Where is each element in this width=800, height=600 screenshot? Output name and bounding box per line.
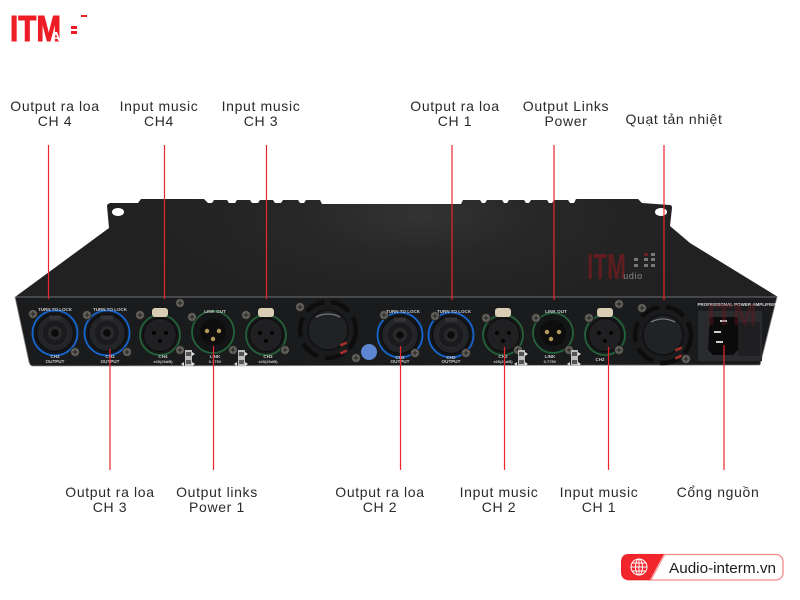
label: output CH2: Output ra loa bbox=[335, 484, 425, 500]
speaker output CH2 bbox=[378, 309, 422, 364]
label: input CH3: Input music bbox=[222, 98, 300, 114]
watermark on panel: ITM bbox=[707, 299, 757, 332]
input XLR CH4 bbox=[136, 298, 184, 364]
cooling fan left bbox=[296, 302, 360, 362]
speaker output CH1: TURN TO LOCK bbox=[437, 309, 472, 314]
label: output CH3: CH 3 bbox=[93, 499, 127, 515]
input XLR CH1 bbox=[584, 300, 625, 362]
speaker output CH1: OUTPUT bbox=[442, 359, 461, 364]
label: output CH1: CH 1 bbox=[438, 113, 472, 129]
input XLR CH4: CH4 bbox=[158, 354, 168, 359]
input XLR CH2: CH2 bbox=[498, 354, 508, 359]
icon: globe bbox=[631, 559, 647, 575]
logo: A bbox=[51, 29, 61, 44]
link out XLR 2 bbox=[514, 309, 581, 366]
label: output links power: Output Links bbox=[523, 98, 609, 114]
website badge: Audio-interm.vn bbox=[669, 560, 776, 577]
logo: ITM bbox=[10, 8, 61, 49]
amplifier top plate bbox=[15, 199, 778, 297]
cooling fan right bbox=[635, 304, 691, 364]
label: output CH3: Output ra loa bbox=[65, 484, 155, 500]
label: input CH2: CH 2 bbox=[482, 499, 516, 515]
label: output links power 1: Output links bbox=[176, 484, 258, 500]
label: input CH3: CH 3 bbox=[244, 113, 278, 129]
label: input CH2: Input music bbox=[460, 484, 538, 500]
rack ear holes bbox=[112, 208, 667, 216]
link out XLR 2: 0.775V bbox=[544, 359, 557, 364]
speaker output CH4 bbox=[28, 307, 80, 364]
speaker output CH3: CH3 bbox=[105, 354, 115, 359]
label: output links power: Power bbox=[545, 113, 587, 129]
rear panel bbox=[15, 297, 777, 366]
speaker output CH3: TURN TO LOCK bbox=[93, 307, 128, 312]
label: output CH4: CH 4 bbox=[38, 113, 72, 129]
link out XLR 1: LINK bbox=[210, 354, 221, 359]
input XLR CH2: ±20(26dB) bbox=[493, 359, 513, 364]
input XLR CH3: ±20(26dB) bbox=[258, 359, 278, 364]
speaker output CH1 bbox=[428, 309, 474, 364]
speaker output CH1: CH2 bbox=[446, 355, 456, 360]
label: input CH1: Input music bbox=[560, 484, 638, 500]
label: output CH1: Output ra loa bbox=[410, 98, 500, 114]
label: input CH4: Input music bbox=[120, 98, 198, 114]
input XLR CH1: CH2 bbox=[595, 357, 605, 362]
label: output links power 1: Power 1 bbox=[189, 499, 245, 515]
link out XLR 1: LINK OUT bbox=[204, 309, 226, 314]
amplifier: rear view bbox=[15, 199, 778, 366]
label: output CH4: Output ra loa bbox=[10, 98, 100, 114]
speaker output CH2: OUTPUT bbox=[391, 359, 410, 364]
label: cooling fan: Quạt tản nhiệt bbox=[625, 111, 723, 127]
callout lines: top bbox=[48, 145, 664, 300]
link out XLR 2: LINK bbox=[545, 354, 556, 359]
link out XLR 1 bbox=[181, 309, 248, 366]
input XLR CH3 bbox=[242, 308, 290, 364]
label: power port: Cổng nguồn bbox=[677, 484, 759, 500]
speaker output CH3 bbox=[82, 307, 132, 364]
speaker output CH4: OUTPUT bbox=[46, 359, 65, 364]
speaker output CH4: CH4 bbox=[50, 354, 60, 359]
website badge bbox=[621, 554, 783, 580]
speaker output CH2: CH2 bbox=[395, 355, 405, 360]
callout lines: bottom bbox=[110, 345, 724, 470]
label: input CH4: CH4 bbox=[144, 113, 174, 129]
input XLR CH2 bbox=[482, 308, 523, 364]
speaker output CH2: TURN TO LOCK bbox=[386, 309, 421, 314]
power inlet bbox=[697, 302, 777, 361]
label: output CH2: CH 2 bbox=[363, 499, 397, 515]
watermark on top plate: udio bbox=[623, 271, 643, 281]
input XLR CH3: CH3 bbox=[263, 354, 273, 359]
speaker output CH3: OUTPUT bbox=[101, 359, 120, 364]
link out XLR 1: 0.775V bbox=[209, 359, 222, 364]
power inlet: PROFESSIONAL POWER AMPLIFIER bbox=[697, 302, 777, 307]
speaker output CH4: TURN TO LOCK bbox=[38, 307, 73, 312]
input XLR CH4: ±20(26dB) bbox=[153, 359, 173, 364]
label: input CH1: CH 1 bbox=[582, 499, 616, 515]
blue sticker bbox=[361, 344, 377, 360]
watermark on top plate: ITM bbox=[587, 246, 626, 287]
link out XLR 2: LINK OUT bbox=[545, 309, 567, 314]
